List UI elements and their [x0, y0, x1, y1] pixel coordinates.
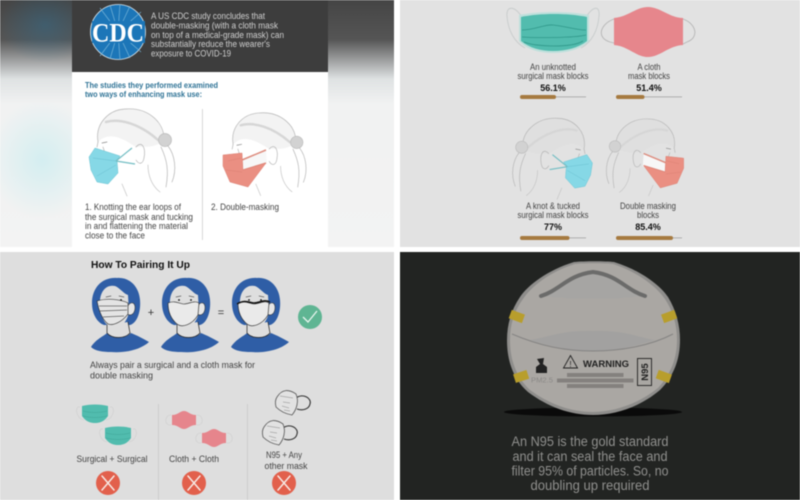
caption 1: close to the face [85, 230, 145, 240]
header text: substantially reduce the wearer's [151, 39, 270, 49]
illustration: double masking [606, 119, 684, 196]
label: unknotted surgical [518, 62, 589, 93]
N95 mask: ! [569, 360, 572, 369]
icon: green check [298, 305, 322, 329]
N95 description [512, 434, 668, 493]
header band [72, 0, 328, 72]
header text: on top of a medical-grade mask) can [151, 30, 284, 40]
illustration: knotted surgical mask [89, 109, 175, 196]
N95 description: doubling up required [530, 478, 650, 493]
panel: N95 [400, 252, 800, 500]
surgical mask [507, 8, 599, 53]
label: cloth: 51.4% [636, 83, 662, 93]
N95 description: filter 95% of particles. So, no [512, 464, 668, 478]
N95 stamp: N95 [640, 363, 651, 381]
label: cloth: A cloth [638, 62, 661, 72]
header text: A US CDC study concludes that [151, 11, 265, 21]
label: double masking: 85.4% [635, 222, 661, 232]
label: cloth: mask blocks [628, 71, 671, 81]
icon: CDC logo [90, 4, 146, 60]
chin crease [530, 331, 655, 351]
N95 description: and it can seal the face and [512, 449, 668, 464]
PM2.5 icon [531, 358, 553, 384]
pairing note: double masking [90, 370, 153, 380]
label: knot and tucked: A knot & tucked [526, 201, 580, 211]
plus sign: + [148, 307, 154, 319]
label: unknotted surgical: 56.1% [540, 83, 566, 93]
bar: 51.4% [616, 95, 682, 99]
caption 1: 1. Knotting the ear loops of [85, 202, 181, 212]
N95 mask [507, 261, 680, 415]
heading: How To Pairing It Up [91, 259, 190, 271]
option: N95 + any [262, 391, 310, 495]
label: knot and tucked [518, 201, 589, 232]
heading: two ways of enhancing mask use: [85, 89, 202, 99]
avatar: double mask [231, 278, 289, 352]
panel: how to pair [0, 252, 394, 500]
nose wire [541, 272, 645, 296]
label: double masking: blocks [637, 210, 660, 220]
header text: exposure to COVID-19 [151, 48, 231, 58]
panel: CDC study [0, 0, 394, 247]
label: unknotted surgical: An unknotted [530, 62, 576, 72]
panel: mask efficacy [400, 0, 800, 247]
label: cloth [628, 62, 671, 93]
option: cloth + cloth: Cloth + Cloth [169, 454, 219, 464]
caption 2: 2. Double-masking [211, 202, 279, 212]
pairing note [90, 360, 255, 380]
label: double masking: Double masking [620, 201, 676, 211]
equals sign: = [218, 307, 224, 319]
label bars [557, 373, 634, 388]
pairing note: Always pair a surgical and a cloth mask for [90, 360, 255, 370]
caption 1: the surgical mask and tucking [85, 212, 193, 222]
nose fold [540, 272, 646, 299]
icon: CDC logo: CDC [92, 18, 144, 48]
PM2.5 icon: PM2.5 [531, 376, 553, 384]
warning triangle [564, 356, 578, 368]
bar: 77% [520, 236, 586, 240]
caption 1: in and flattening the material [85, 221, 188, 231]
avatar: surgical mask [91, 278, 149, 352]
label: double masking [620, 201, 676, 232]
illustration: knot and tucked [513, 118, 592, 199]
N95 description: An N95 is the gold standard [512, 434, 668, 449]
label: unknotted surgical: surgical mask blocks [518, 71, 589, 81]
option: cloth + cloth [166, 411, 232, 495]
cloth mask [601, 7, 695, 57]
bar: 85.4% [616, 236, 682, 240]
header text [151, 11, 284, 58]
bar: 56.1% [520, 95, 586, 99]
header text: double-masking (with a cloth mask [151, 20, 278, 30]
option: N95 + any: N95 + Any [266, 450, 303, 460]
avatar: cloth mask [161, 278, 219, 352]
label: knot and tucked: 77% [544, 222, 562, 232]
yellow tabs [509, 310, 677, 383]
caption 1 [85, 202, 193, 240]
option: surgical + surgical [76, 404, 148, 495]
heading: The studies they performed examined [85, 80, 218, 90]
heading [85, 80, 218, 99]
mask shadow [504, 408, 682, 416]
label: knot and tucked: surgical mask blocks [518, 210, 589, 220]
illustration: double masking [223, 113, 306, 196]
N95 stamp [638, 358, 652, 386]
warning text: WARNING [583, 359, 629, 370]
option: surgical + surgical: Surgical + Surgical [76, 454, 148, 464]
option: N95 + any: other mask [264, 461, 308, 471]
